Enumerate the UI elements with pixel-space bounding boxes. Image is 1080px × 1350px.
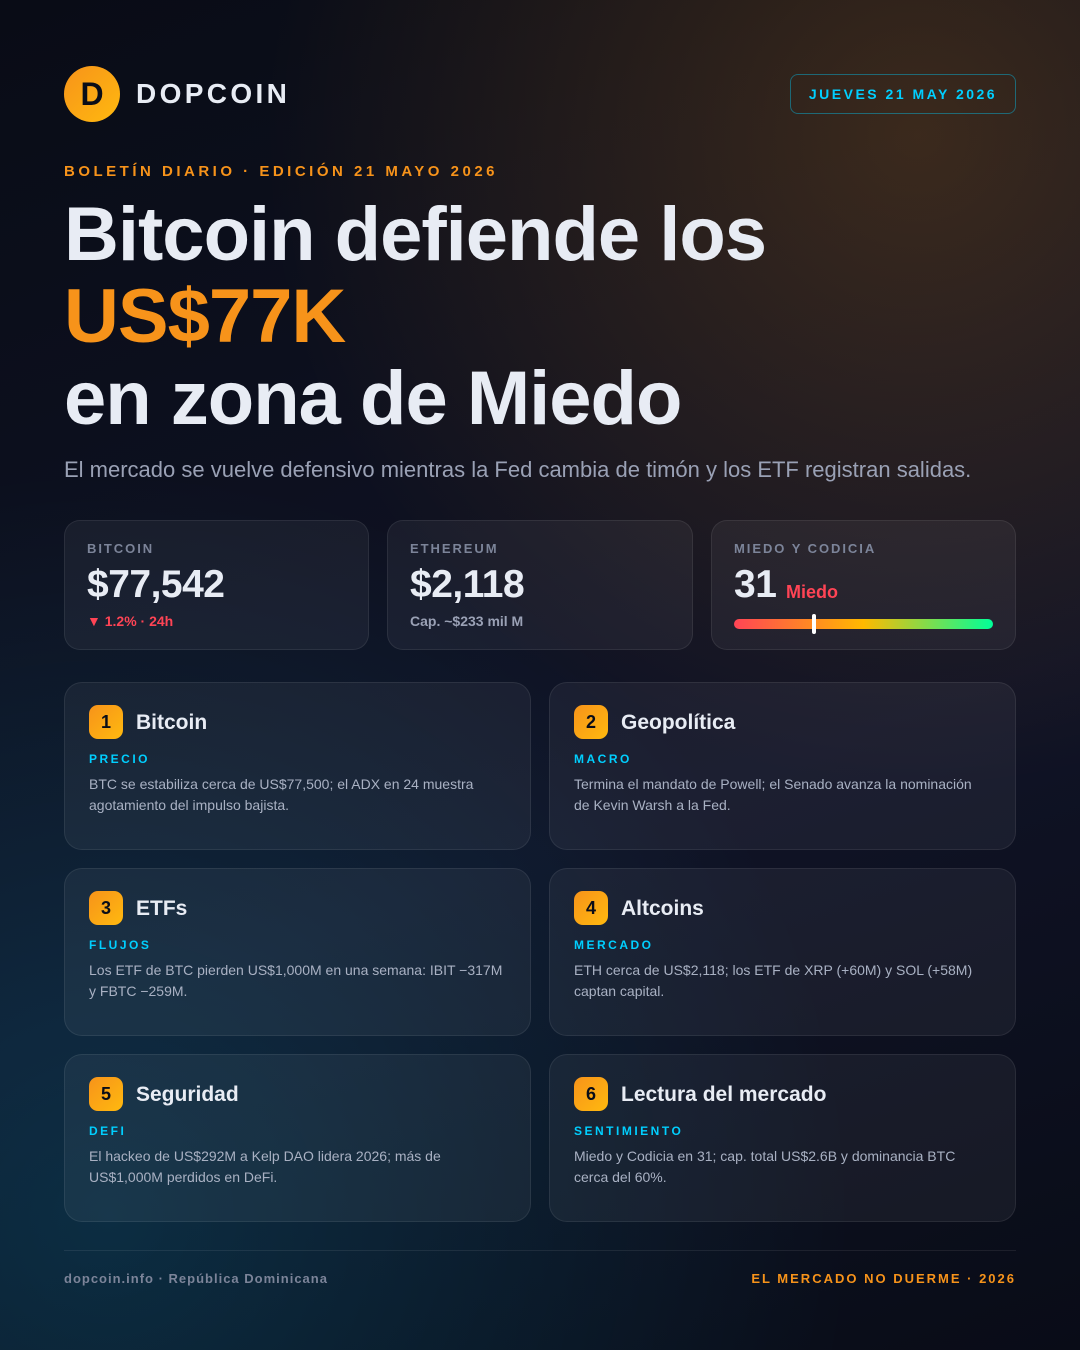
panel: bitcoin price: ▼ 1.2% · 24h [87, 613, 173, 629]
title [64, 192, 766, 441]
footer right: EL MERCADO NO DUERME · 2026 [751, 1271, 1016, 1286]
panel: 5 seguridad: DEFI [89, 1124, 126, 1138]
panel: 2 geopolitica: MACRO [574, 752, 632, 766]
panel: bitcoin price: BITCOIN [87, 541, 154, 556]
panel: 1 bitcoin: PRECIO [89, 752, 150, 766]
brand name: DOPCOIN [136, 78, 290, 109]
panel: 5 seguridad: El hackeo de US$292M a Kelp DAO lidera 2026; más de US$1,000M perdidos en DeFi. [89, 1148, 441, 1185]
panel: 2 geopolitica: Geopolítica [621, 711, 735, 734]
panel: 6 lectura [549, 1054, 1016, 1222]
panel: 4 altcoins: Altcoins [621, 897, 704, 920]
panel: 5 seguridad: 5 [101, 1084, 111, 1104]
logo [64, 66, 290, 122]
panel: ethereum price [387, 520, 693, 650]
panel: 3 etfs: 3 [101, 898, 111, 918]
panel: fear and greed [711, 520, 1016, 650]
panel: ethereum price: Cap. ~$233 mil M [410, 613, 523, 629]
panel: 2 geopolitica: 2 [586, 712, 596, 732]
panel: 3 etfs [64, 868, 531, 1036]
panel: 4 altcoins: ETH cerca de US$2,118; los ETF de XRP (+60M) y SOL (+58M) captan capital. [574, 962, 972, 999]
panel: bitcoin price: $77,542 [87, 563, 224, 606]
panel: fear and greed: MIEDO Y CODICIA [734, 541, 876, 556]
title: Bitcoin defiende los [64, 192, 766, 277]
panel: ethereum price: ETHEREUM [410, 541, 499, 556]
panel: 6 lectura: SENTIMIENTO [574, 1124, 683, 1138]
icon: D coin [64, 66, 120, 122]
panel: 3 etfs: Los ETF de BTC pierden US$1,000M en una semana: IBIT −317M y FBTC −259M. [89, 962, 502, 999]
fear label: Miedo [786, 582, 838, 602]
gauge bar [734, 619, 993, 629]
subtitle: El mercado se vuelve defensivo mientras la Fed cambia de timón y los ETF registran salidas. [64, 457, 971, 482]
panel: 4 altcoins: 4 [586, 898, 596, 918]
panel: bitcoin price [64, 520, 369, 650]
panel: 1 bitcoin: 1 [101, 712, 111, 732]
panel: 6 lectura: 6 [586, 1084, 596, 1104]
footer left: dopcoin.info · República Dominicana [64, 1271, 328, 1286]
panel: 5 seguridad: Seguridad [136, 1083, 239, 1106]
panel: ethereum price: $2,118 [410, 563, 524, 606]
date badge [790, 74, 1016, 114]
panel: 4 altcoins [549, 868, 1016, 1036]
title: en zona de Miedo [64, 356, 681, 441]
icon: D coin: D [80, 76, 104, 112]
panel: fear and greed: 31 [734, 563, 776, 606]
panel: 4 altcoins: MERCADO [574, 938, 654, 952]
date badge: JUEVES 21 MAY 2026 [809, 86, 997, 102]
panel: 1 bitcoin: BTC se estabiliza cerca de US$77,500; el ADX en 24 muestra agotamiento del impulso bajista. [89, 776, 473, 813]
panel: 1 bitcoin: Bitcoin [136, 711, 207, 734]
panel: 6 lectura: Miedo y Codicia en 31; cap. total US$2.6B y dominancia BTC cerca del 60%. [574, 1148, 955, 1185]
panel: 1 bitcoin [64, 682, 531, 850]
panel: 2 geopolitica [549, 682, 1016, 850]
kicker: BOLETÍN DIARIO · EDICIÓN 21 MAYO 2026 [64, 163, 498, 180]
panel: 6 lectura: Lectura del mercado [621, 1083, 826, 1106]
panel: 3 etfs: FLUJOS [89, 938, 151, 952]
gauge marker [812, 614, 816, 634]
panel: 3 etfs: ETFs [136, 897, 187, 920]
panel: 2 geopolitica: Termina el mandato de Powell; el Senado avanza la nominación de Kevin Warsh a la Fed. [574, 776, 972, 813]
panel: 5 seguridad [64, 1054, 531, 1222]
title: US$77K [64, 274, 345, 359]
